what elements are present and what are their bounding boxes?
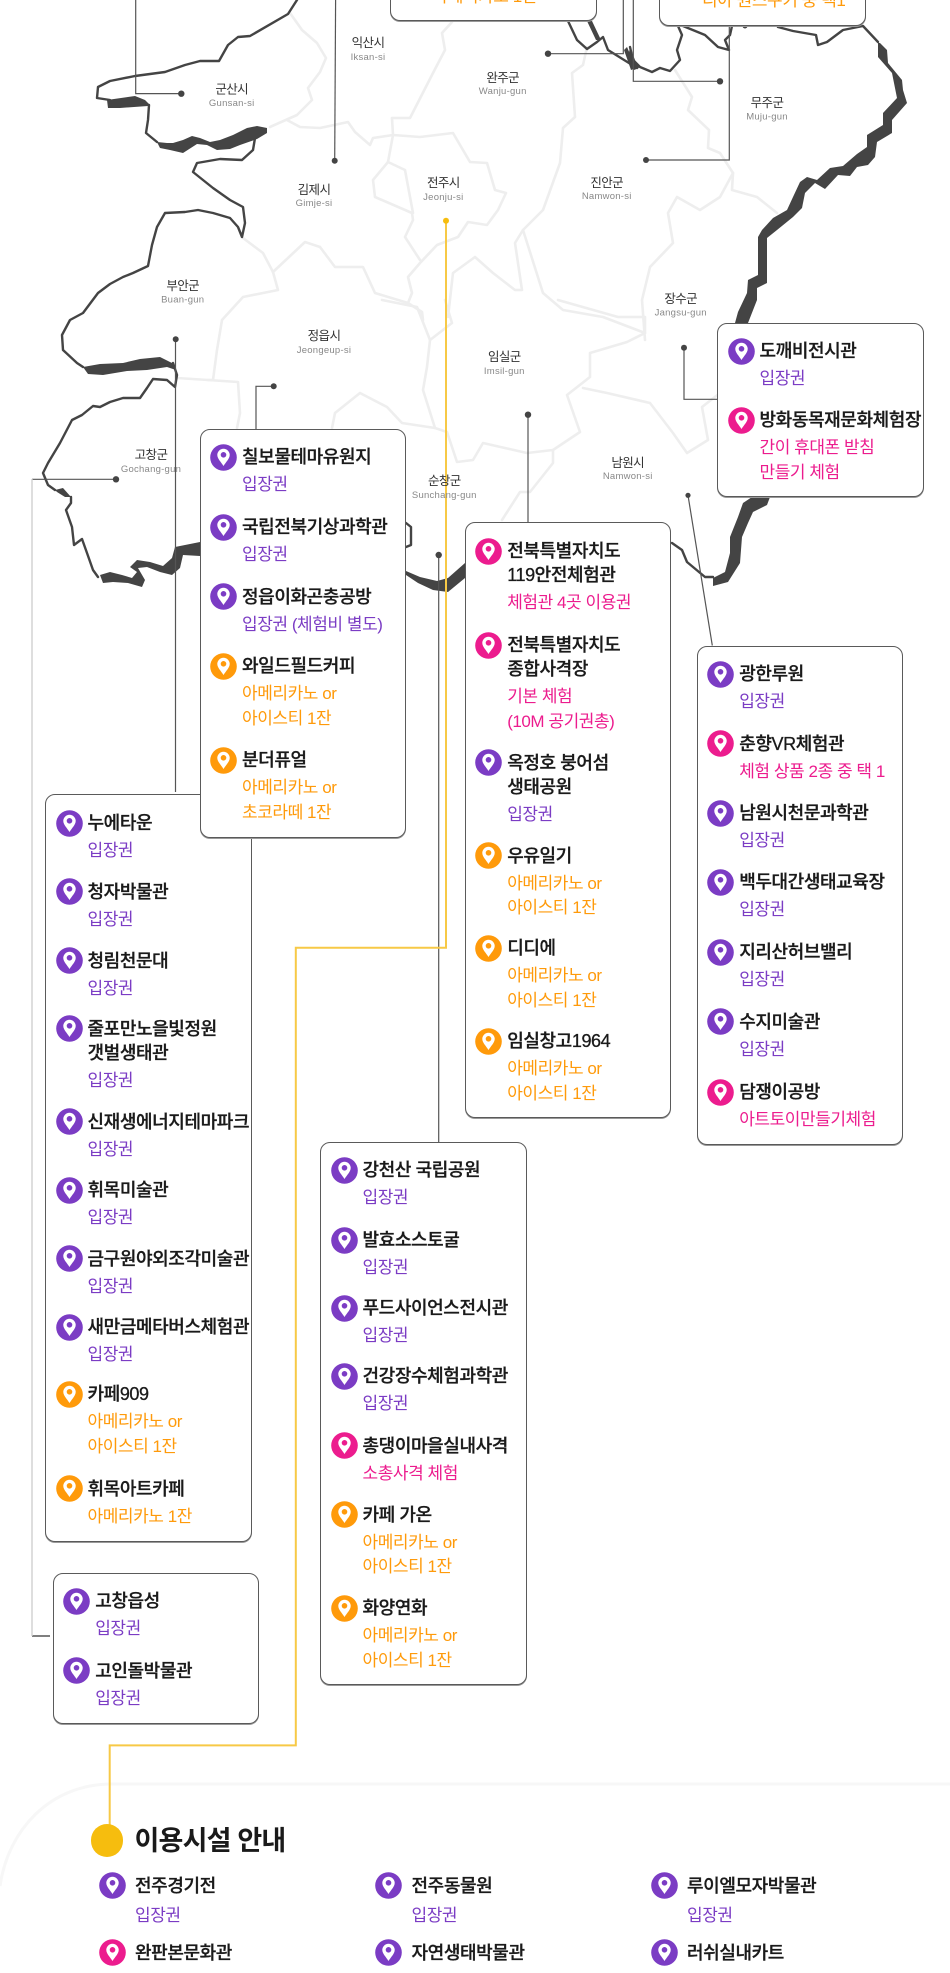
item: 춘향VR체험관: 춘향VR체험관 [739, 734, 844, 754]
item: 광한루원: 광한루원 [739, 664, 804, 684]
item: 임실창고1964: 아메리카노 or [507, 1059, 602, 1078]
item: 신재생에너지테마파크 [56, 1108, 249, 1159]
item: 옥정호 붕어섬 생태공원: 입장권 [507, 805, 553, 824]
region labels: 장수군 [664, 292, 697, 306]
item: 새만금메타버스체험관: 입장권 [88, 1345, 133, 1364]
item: 분더퓨얼: 초코라떼 1잔 [242, 803, 331, 822]
item: 방화동목재문화체험장 [728, 407, 922, 482]
item: 지리산허브밸리 [707, 939, 852, 989]
item: 우유일기 [475, 842, 602, 917]
region labels: 순창군 [428, 474, 461, 488]
item: 국립전북기상과학관 [210, 514, 388, 564]
region labels: Namwon-si [603, 471, 653, 482]
list item: 루이엘모자박물관 [687, 1874, 917, 1934]
item: 백두대간생태교육장: 입장권 [739, 900, 785, 919]
item: 카페 가온: 아메리카노 or [362, 1533, 457, 1552]
item: 정읍이화곤충공방: 정읍이화곤충공방 [242, 587, 371, 607]
region labels: Jeongeup-si [297, 345, 351, 356]
item: 남원시천문과학관: 남원시천문과학관 [739, 803, 868, 823]
district boundaries [177, 13, 777, 520]
region labels: 정읍시 [308, 329, 340, 343]
list item: 루이엘모자박물관: 입장권 [687, 1906, 733, 1924]
region labels: Sunchang-gun [412, 490, 477, 501]
item: 발효소스토굴: 발효소스토굴 [362, 1230, 459, 1250]
item: 줄포만노을빛정원 갯벌생태관: 입장권 [88, 1071, 133, 1090]
region labels: Muju-gun [746, 112, 788, 122]
item: 고인돌박물관: 고인돌박물관 [95, 1661, 192, 1681]
panel: top right (cut off) [659, 0, 866, 26]
item: 카페 가온 [331, 1501, 458, 1576]
item: 지리산허브밸리: 입장권 [739, 970, 785, 989]
item: 카페909: 카페909 [88, 1384, 149, 1404]
item: 와일드필드커피: 아이스티 1잔 [242, 709, 331, 728]
item: 수지미술관: 수지미술관 [739, 1012, 820, 1032]
item: 광한루원: 입장권 [739, 692, 785, 711]
item: 휘목아트카페 [56, 1475, 192, 1526]
list item: 러쉬실내카트 [687, 1940, 917, 1972]
list item: 자연생태박물관 [412, 1940, 642, 1972]
item: 분더퓨얼: 분더퓨얼 [242, 750, 307, 770]
item: 줄포만노을빛정원 갯벌생태관 [56, 1015, 217, 1090]
item: 줄포만노을빛정원 갯벌생태관: 줄포만노을빛정원 [88, 1019, 217, 1039]
item: 화양연화 [331, 1595, 458, 1670]
item: 남원시천문과학관: 입장권 [739, 831, 785, 850]
item: 와일드필드커피: 아메리카노 or [242, 684, 336, 703]
region labels: Gunsan-si [209, 98, 254, 109]
item: 총댕이마을실내사격 [331, 1432, 508, 1483]
item: 휘목미술관: 입장권 [88, 1208, 133, 1227]
item: 카페909: 아이스티 1잔 [88, 1437, 177, 1456]
item: 신재생에너지테마파크: 입장권 [88, 1140, 133, 1159]
item: 칠보물테마유원지: 입장권 [242, 475, 288, 494]
region labels: Iksan-si [351, 52, 385, 63]
item: 방화동목재문화체험장: 간이 휴대폰 받침 [760, 438, 874, 457]
item: 옥정호 붕어섬 생태공원: 옥정호 붕어섬 [507, 753, 609, 773]
region labels: Namwon-si [582, 191, 632, 202]
item: 금구원야외조각미술관: 금구원야외조각미술관 [88, 1249, 249, 1269]
item: 백두대간생태교육장: 백두대간생태교육장 [739, 872, 885, 892]
region labels: 익산시 [352, 36, 384, 50]
item: 담쟁이공방: 담쟁이공방 [739, 1082, 820, 1102]
item: 국립전북기상과학관: 입장권 [242, 545, 288, 564]
item: 칠보물테마유원지: 칠보물테마유원지 [242, 447, 371, 467]
item: 정읍이화곤충공방: 입장권 (체험비 별도) [242, 615, 382, 634]
item: 청자박물관: 입장권 [88, 910, 133, 929]
item: 건강장수체험과학관: 건강장수체험과학관 [362, 1366, 508, 1386]
item: 휘목미술관: 휘목미술관 [88, 1180, 168, 1200]
item: 수지미술관: 입장권 [739, 1040, 785, 1059]
item: 디디에: 아메리카노 or [507, 966, 602, 985]
region labels: 부안군 [166, 279, 199, 293]
coast thick bands [55, 21, 907, 592]
region labels: Imsil-gun [484, 366, 525, 377]
item: 도깨비전시관 [728, 338, 856, 388]
item: 디디에: 디디에 [507, 938, 556, 958]
item: 금구원야외조각미술관 [56, 1245, 250, 1296]
list item: 전주경기전: 입장권 [135, 1906, 181, 1924]
item: 건강장수체험과학관: 입장권 [362, 1394, 408, 1413]
region labels: 전주시 [427, 176, 460, 190]
region labels: 임실군 [488, 350, 521, 364]
pale connector to Gochang panel [31, 479, 33, 1636]
region labels: Jeonju-si [423, 192, 463, 203]
item: 도깨비전시관: 도깨비전시관 [760, 341, 856, 361]
list item: 전주경기전 [99, 1872, 216, 1924]
item: 옥정호 붕어섬 생태공원: 생태공원 [507, 777, 572, 797]
item: 누에타운: 입장권 [88, 841, 133, 860]
item: 임실창고1964 [475, 1028, 610, 1103]
region labels: 군산시 [215, 82, 248, 96]
region labels: 무주군 [751, 96, 783, 110]
region labels: Jangsu-gun [655, 308, 707, 318]
item: 푸드사이언스전시관: 푸드사이언스전시관 [362, 1298, 508, 1318]
list item: 전주동물원: 입장권 [412, 1906, 457, 1924]
section marker: yellow circle [90, 1824, 123, 1856]
item: 휘목미술관 [56, 1177, 168, 1227]
list item: 자연생태박물관: 자연생태박물관 [412, 1942, 525, 1962]
item: 줄포만노을빛정원 갯벌생태관: 갯벌생태관 [88, 1043, 168, 1063]
item: 총댕이마을실내사격: 소총사격 체험 [362, 1464, 458, 1483]
region labels: Wanju-gun [479, 86, 527, 97]
panel: Jangsu [717, 323, 924, 497]
item: 춘향VR체험관 [707, 730, 885, 781]
item: 수지미술관 [707, 1008, 820, 1059]
region labels: Gochang-gun [121, 464, 181, 475]
item: 카페 가온: 카페 가온 [362, 1505, 432, 1525]
item: 임실창고1964: 아이스티 1잔 [507, 1084, 596, 1103]
item: 새만금메타버스체험관: 새만금메타버스체험관 [88, 1317, 249, 1337]
item: 발효소스토굴 [331, 1227, 460, 1277]
item: 분더퓨얼: 아메리카노 or [242, 778, 336, 797]
item: 휘목아트카페: 휘목아트카페 [88, 1479, 184, 1499]
connector lines [32, 0, 729, 1636]
item: 전북특별자치도 종합사격장: 전북특별자치도 [507, 635, 620, 655]
item: 전북특별자치도 119안전체험관: 전북특별자치도 [507, 541, 620, 561]
item: 국립전북기상과학관: 국립전북기상과학관 [242, 517, 387, 537]
region labels [121, 36, 788, 501]
item: 담쟁이공방: 아트토이만들기체험 [739, 1110, 876, 1129]
item: 강천산 국립공원 [331, 1157, 480, 1207]
region labels: 진안군 [590, 176, 623, 190]
item: 건강장수체험과학관 [331, 1363, 508, 1413]
item: 고창읍성 [63, 1588, 160, 1638]
panel: Buan [45, 794, 252, 1542]
item: 방화동목재문화체험장: 만들기 체험 [760, 463, 840, 482]
list item: 러쉬실내카트: 러쉬실내카트 [687, 1942, 784, 1962]
item: 누에타운 [56, 810, 152, 860]
item: 전북특별자치도 119안전체험관 [475, 538, 631, 612]
item: 도깨비전시관: 입장권 [760, 369, 805, 388]
item: 화양연화: 아이스티 1잔 [362, 1651, 452, 1670]
item: 디디에 [475, 935, 602, 1010]
item: 광한루원 [707, 661, 804, 711]
connector dots [113, 50, 723, 558]
heading: 이용시설 안내: 이용시설 안내 [134, 1826, 285, 1856]
item: 누에타운: 누에타운 [88, 813, 152, 833]
item: 휘목아트카페: 아메리카노 1잔 [88, 1507, 192, 1526]
item: 청자박물관 [56, 878, 168, 929]
panel: Namwon [697, 646, 903, 1145]
item: 전북특별자치도 119안전체험관: 체험관 4곳 이용권 [507, 593, 631, 612]
item: 강천산 국립공원: 입장권 [362, 1188, 408, 1207]
item: 옥정호 붕어섬 생태공원 [475, 749, 609, 824]
item: 우유일기: 우유일기 [507, 846, 572, 866]
region labels: 남원시 [611, 456, 644, 470]
item: 지리산허브밸리: 지리산허브밸리 [739, 942, 852, 962]
item: 강천산 국립공원: 강천산 국립공원 [362, 1160, 480, 1180]
item: 임실창고1964: 임실창고1964 [507, 1031, 610, 1051]
coastline [43, 0, 878, 577]
item: 전북특별자치도 119안전체험관: 119안전체험관 [507, 565, 615, 585]
item: 백두대간생태교육장 [707, 869, 885, 919]
item: 고인돌박물관: 입장권 [95, 1689, 141, 1708]
item: 카페 가온: 아이스티 1잔 [362, 1557, 452, 1576]
item: 고인돌박물관 [63, 1657, 192, 1708]
item: 청림천문대 [56, 947, 168, 998]
yellow route line [110, 218, 449, 1826]
item: 우유일기: 아메리카노 or [507, 874, 602, 893]
region labels: Buan-gun [161, 294, 204, 306]
list item: 완판본문화관: 완판본문화관 [135, 1942, 232, 1962]
item: 정읍이화곤충공방 [210, 583, 382, 634]
item: 와일드필드커피: 와일드필드커피 [242, 656, 355, 676]
item: 우유일기: 아이스티 1잔 [507, 898, 596, 917]
list item: 루이엘모자박물관: 루이엘모자박물관 [687, 1876, 816, 1896]
item: 새만금메타버스체험관 [56, 1314, 250, 1364]
item: 발효소스토굴: 입장권 [362, 1258, 408, 1277]
item: 카페909 [56, 1381, 182, 1456]
item: 춘향VR체험관: 체험 상품 2종 중 택 1 [739, 762, 885, 781]
panel: Sunchang [320, 1142, 526, 1685]
region labels: Gimje-si [296, 198, 332, 209]
item: 분더퓨얼 [210, 747, 337, 822]
panel: top center (cut off) [390, 0, 597, 21]
item: 전북특별자치도 종합사격장 [475, 632, 620, 731]
item: 청자박물관: 청자박물관 [88, 882, 168, 902]
bottom section background curve [0, 1784, 950, 1886]
list item: 전주동물원: 전주동물원 [412, 1876, 492, 1896]
item: 총댕이마을실내사격: 총댕이마을실내사격 [362, 1436, 508, 1456]
item: 고창읍성: 고창읍성 [95, 1591, 160, 1611]
item: 남원시천문과학관 [707, 800, 868, 850]
region labels: 고창군 [135, 448, 167, 462]
item: 푸드사이언스전시관: 입장권 [362, 1326, 408, 1345]
item: 청림천문대: 입장권 [88, 979, 133, 998]
item: 전북특별자치도 종합사격장: (10M 공기권총) [507, 712, 614, 731]
item: 푸드사이언스전시관 [331, 1295, 508, 1345]
item: 담쟁이공방 [707, 1079, 876, 1129]
region labels: 김제시 [298, 183, 330, 197]
list item: 전주동물원 [412, 1874, 642, 1934]
list item: 완판본문화관 [135, 1940, 365, 1972]
region labels: 완주군 [486, 71, 519, 85]
item: 고창읍성: 입장권 [95, 1619, 141, 1638]
panel: Gochang [53, 1572, 259, 1724]
item: 카페909: 아메리카노 or [88, 1412, 182, 1431]
item: 화양연화: 아메리카노 or [362, 1626, 457, 1645]
panel: Jeongeup [200, 429, 406, 838]
list item: 전주경기전: 전주경기전 [135, 1876, 216, 1896]
item: 칠보물테마유원지 [210, 444, 371, 494]
item: 방화동목재문화체험장: 방화동목재문화체험장 [760, 410, 921, 430]
item: 화양연화: 화양연화 [362, 1598, 427, 1618]
item: 전북특별자치도 종합사격장: 기본 체험 [507, 687, 572, 706]
item: 청림천문대: 청림천문대 [88, 951, 168, 971]
item: 전북특별자치도 종합사격장: 종합사격장 [507, 659, 588, 679]
item: 금구원야외조각미술관: 입장권 [88, 1277, 133, 1296]
panel: Imsil [465, 522, 671, 1118]
item: 신재생에너지테마파크: 신재생에너지테마파크 [88, 1112, 249, 1132]
item: 디디에: 아이스티 1잔 [507, 991, 596, 1010]
item: 와일드필드커피 [210, 653, 355, 728]
